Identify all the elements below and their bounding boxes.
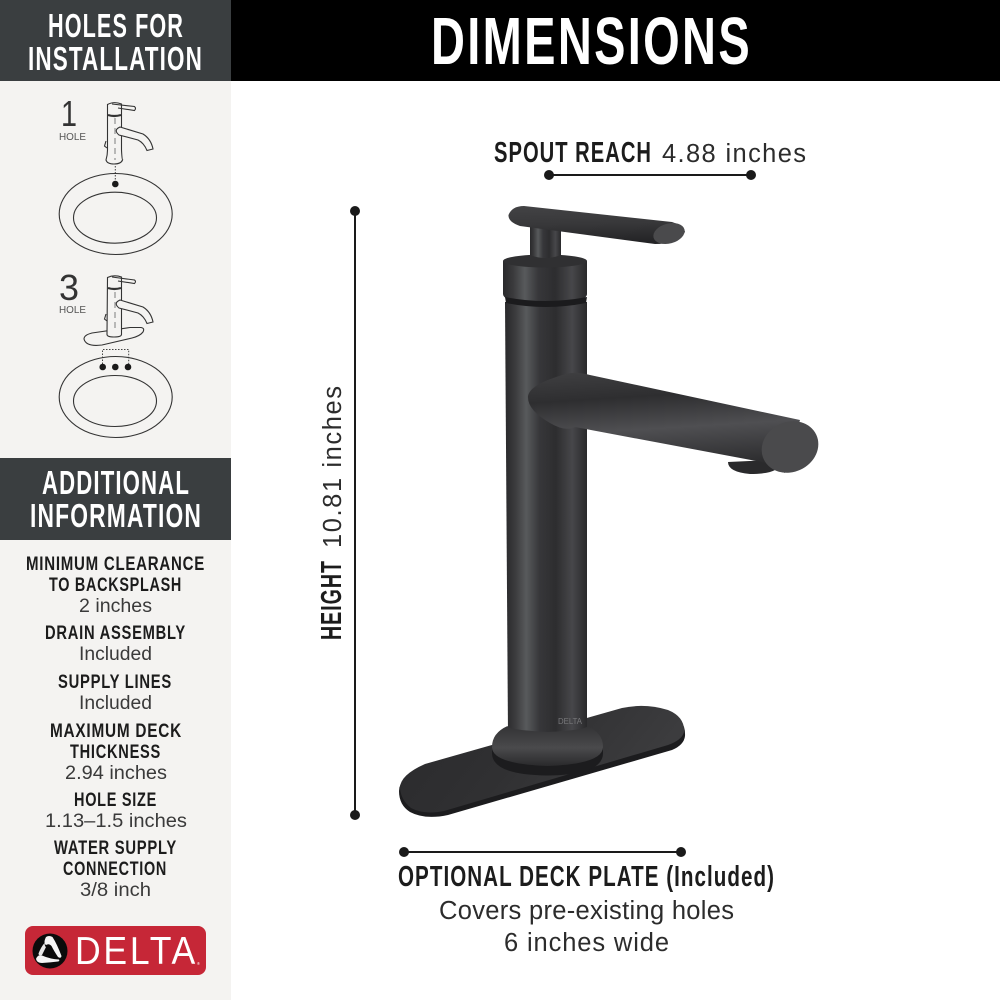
title: dimensions [231, 0, 1000, 81]
spout end [753, 412, 827, 482]
faucet body [505, 302, 587, 735]
spec: supply lines: Included [79, 693, 152, 714]
title: dimensions: DIMENSIONS [431, 4, 752, 79]
icon: three hole installation [59, 267, 172, 438]
text block: optional deck plate [398, 861, 775, 957]
icon: one hole installation [59, 93, 172, 254]
label: height [316, 386, 348, 640]
illustration: faucet [399, 206, 827, 817]
label: 3 hole: HOLE [59, 304, 86, 316]
label: 3 hole [59, 267, 86, 316]
text block: specification list [26, 553, 205, 901]
aerator [728, 460, 775, 474]
spec: water supply connection: CONNECTION [63, 858, 167, 880]
deck plate [399, 707, 685, 817]
spec: drain assembly [45, 622, 186, 665]
heading: holes for installation: INSTALLATION [28, 40, 203, 77]
base flare [492, 726, 603, 776]
text block: optional deck plate: 6 inches wide [504, 929, 669, 957]
icon: deck plate faucet [84, 276, 153, 345]
collar [503, 254, 587, 307]
spout [528, 373, 800, 473]
text block: optional deck plate: Covers pre-existing holes [439, 897, 734, 925]
logo: delta [25, 926, 206, 975]
spec: drain assembly: DRAIN ASSEMBLY [45, 622, 186, 644]
panel: left sidebar background [0, 0, 231, 1000]
lever handle [508, 206, 687, 247]
spec: water supply connection [54, 837, 177, 901]
heading: holes for installation: HOLES FOR [48, 7, 184, 44]
spec: water supply connection: 3/8 inch [80, 880, 151, 901]
dimension line: spout reach [544, 170, 756, 180]
spec: maximum deck thickness: MAXIMUM DECK [50, 720, 182, 742]
label: spout reach: SPOUT REACH [494, 137, 652, 169]
label: height: HEIGHT [316, 560, 348, 640]
lever stem [530, 225, 561, 258]
label: 3 hole: 3 [59, 267, 79, 308]
label: height: 10.81 inches [319, 386, 347, 548]
spec: supply lines [58, 671, 172, 714]
spec: maximum deck thickness: THICKNESS [70, 741, 161, 763]
spec: minimum clearance: 2 inches [79, 596, 152, 617]
logo: delta: DELTA [75, 930, 198, 973]
icon: single hole sink [59, 166, 172, 254]
delta engraving: DELTA [558, 716, 582, 726]
spec: minimum clearance: MINIMUM CLEARANCE [26, 553, 205, 575]
spec: water supply connection: WATER SUPPLY [54, 837, 177, 859]
spec: maximum deck thickness: 2.94 inches [65, 763, 167, 784]
heading: additional information [0, 458, 231, 540]
icon: single hole faucet [104, 103, 153, 164]
heading: holes for installation [0, 0, 231, 81]
icon: three hole sink [59, 350, 172, 438]
spec: minimum clearance: TO BACKSPLASH [49, 574, 182, 596]
label: 1 hole: 1 [61, 93, 77, 134]
label: 1 hole: HOLE [59, 131, 86, 143]
spec: minimum clearance [26, 553, 205, 617]
heading: additional information: INFORMATION [30, 497, 202, 534]
spec: hole size: 1.13–1.5 inches [45, 811, 187, 832]
spec: hole size: HOLE SIZE [74, 789, 157, 811]
spec: hole size [45, 789, 187, 832]
spec: supply lines: SUPPLY LINES [58, 671, 172, 693]
spec: drain assembly: Included [79, 644, 152, 665]
text block: optional deck plate: OPTIONAL DECK PLATE (Included) [398, 861, 775, 893]
logo: delta: ® [197, 961, 200, 966]
spec: maximum deck thickness [50, 720, 182, 784]
label: spout reach: 4.88 inches [662, 140, 806, 168]
dimension line: deck plate [399, 847, 686, 857]
label: 1 hole [59, 93, 86, 143]
dimension line: height [350, 206, 360, 820]
heading: additional information: ADDITIONAL [42, 464, 190, 501]
